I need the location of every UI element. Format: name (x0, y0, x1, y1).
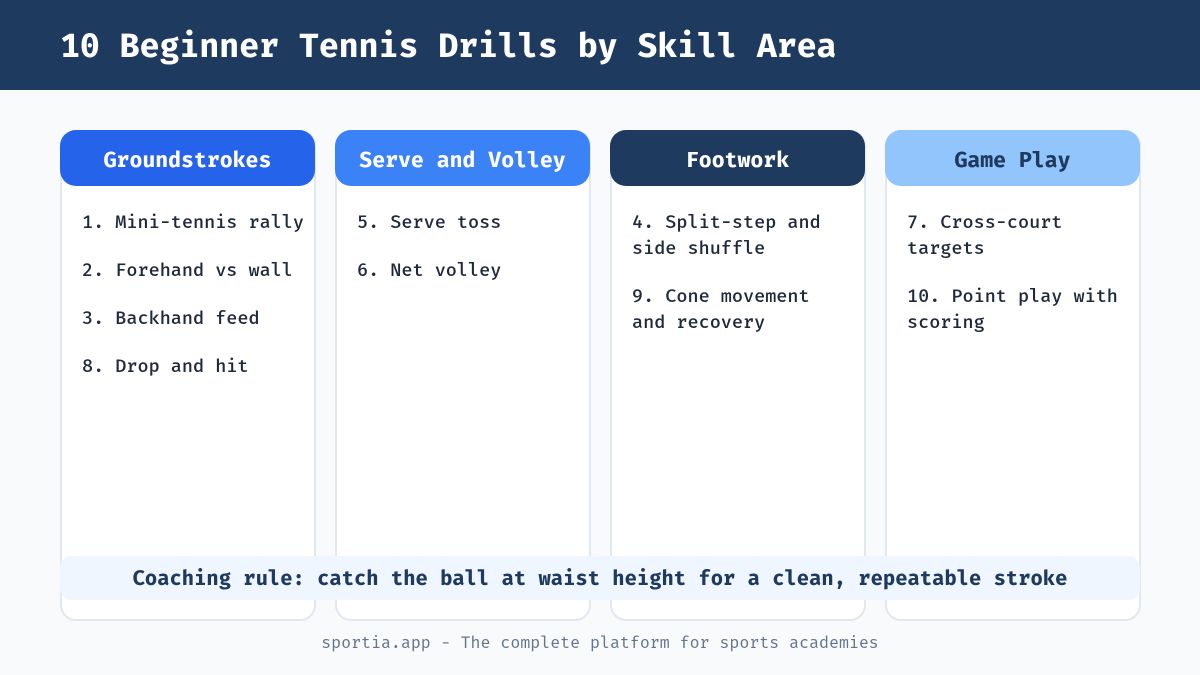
drill list: Footwork (632, 211, 821, 333)
drill list: Groundstrokes (82, 211, 304, 377)
drill 9 (632, 285, 810, 333)
drill 6: 6. Net volley (357, 259, 501, 281)
title: 10 Beginner Tennis Drills by Skill Area (60, 26, 837, 66)
drill 7 (907, 211, 1062, 259)
panel: Footwork (610, 130, 866, 621)
drill 8: 8. Drop and hit (82, 355, 249, 377)
drill 4: side shuffle (632, 237, 765, 259)
panel: Serve and Volley (335, 130, 591, 621)
callout: coaching rule (60, 556, 1140, 600)
heading: Serve and Volley: Serve and Volley (359, 147, 566, 173)
drill 4 (632, 211, 821, 259)
panel: Groundstrokes (60, 130, 316, 621)
drill 5: 5. Serve toss (357, 211, 501, 233)
drill 9: 9. Cone movement (632, 285, 810, 307)
drill 9: and recovery (632, 311, 765, 333)
footer: sportia.app - The complete platform for sports academies (321, 633, 879, 653)
drill 3: 3. Backhand feed (82, 307, 260, 329)
drill 10: scoring (907, 311, 985, 333)
drill 4: 4. Split-step and (632, 211, 821, 233)
drill 7: 7. Cross-court (907, 211, 1062, 233)
panel: Game Play (885, 130, 1141, 621)
callout: coaching rule: Coaching rule: catch the ball at waist height for a clean, repeatable stroke (133, 567, 1067, 591)
heading: Footwork (610, 130, 865, 186)
heading: Serve and Volley (335, 130, 590, 186)
drill 10 (907, 285, 1118, 333)
drill 2: 2. Forehand vs wall (82, 259, 293, 281)
heading: Game Play: Game Play (954, 147, 1071, 173)
heading: Footwork: Footwork (686, 147, 789, 173)
heading: Groundstrokes (60, 130, 315, 186)
drill 1: 1. Mini-tennis rally (82, 211, 304, 233)
drill list: Game Play (907, 211, 1118, 333)
heading: Game Play (885, 130, 1140, 186)
heading: Groundstrokes: Groundstrokes (104, 147, 271, 173)
title banner (0, 0, 1200, 90)
drill 10: 10. Point play with (907, 285, 1118, 307)
drill list: Serve and Volley (357, 211, 501, 281)
drill 7: targets (907, 237, 985, 259)
